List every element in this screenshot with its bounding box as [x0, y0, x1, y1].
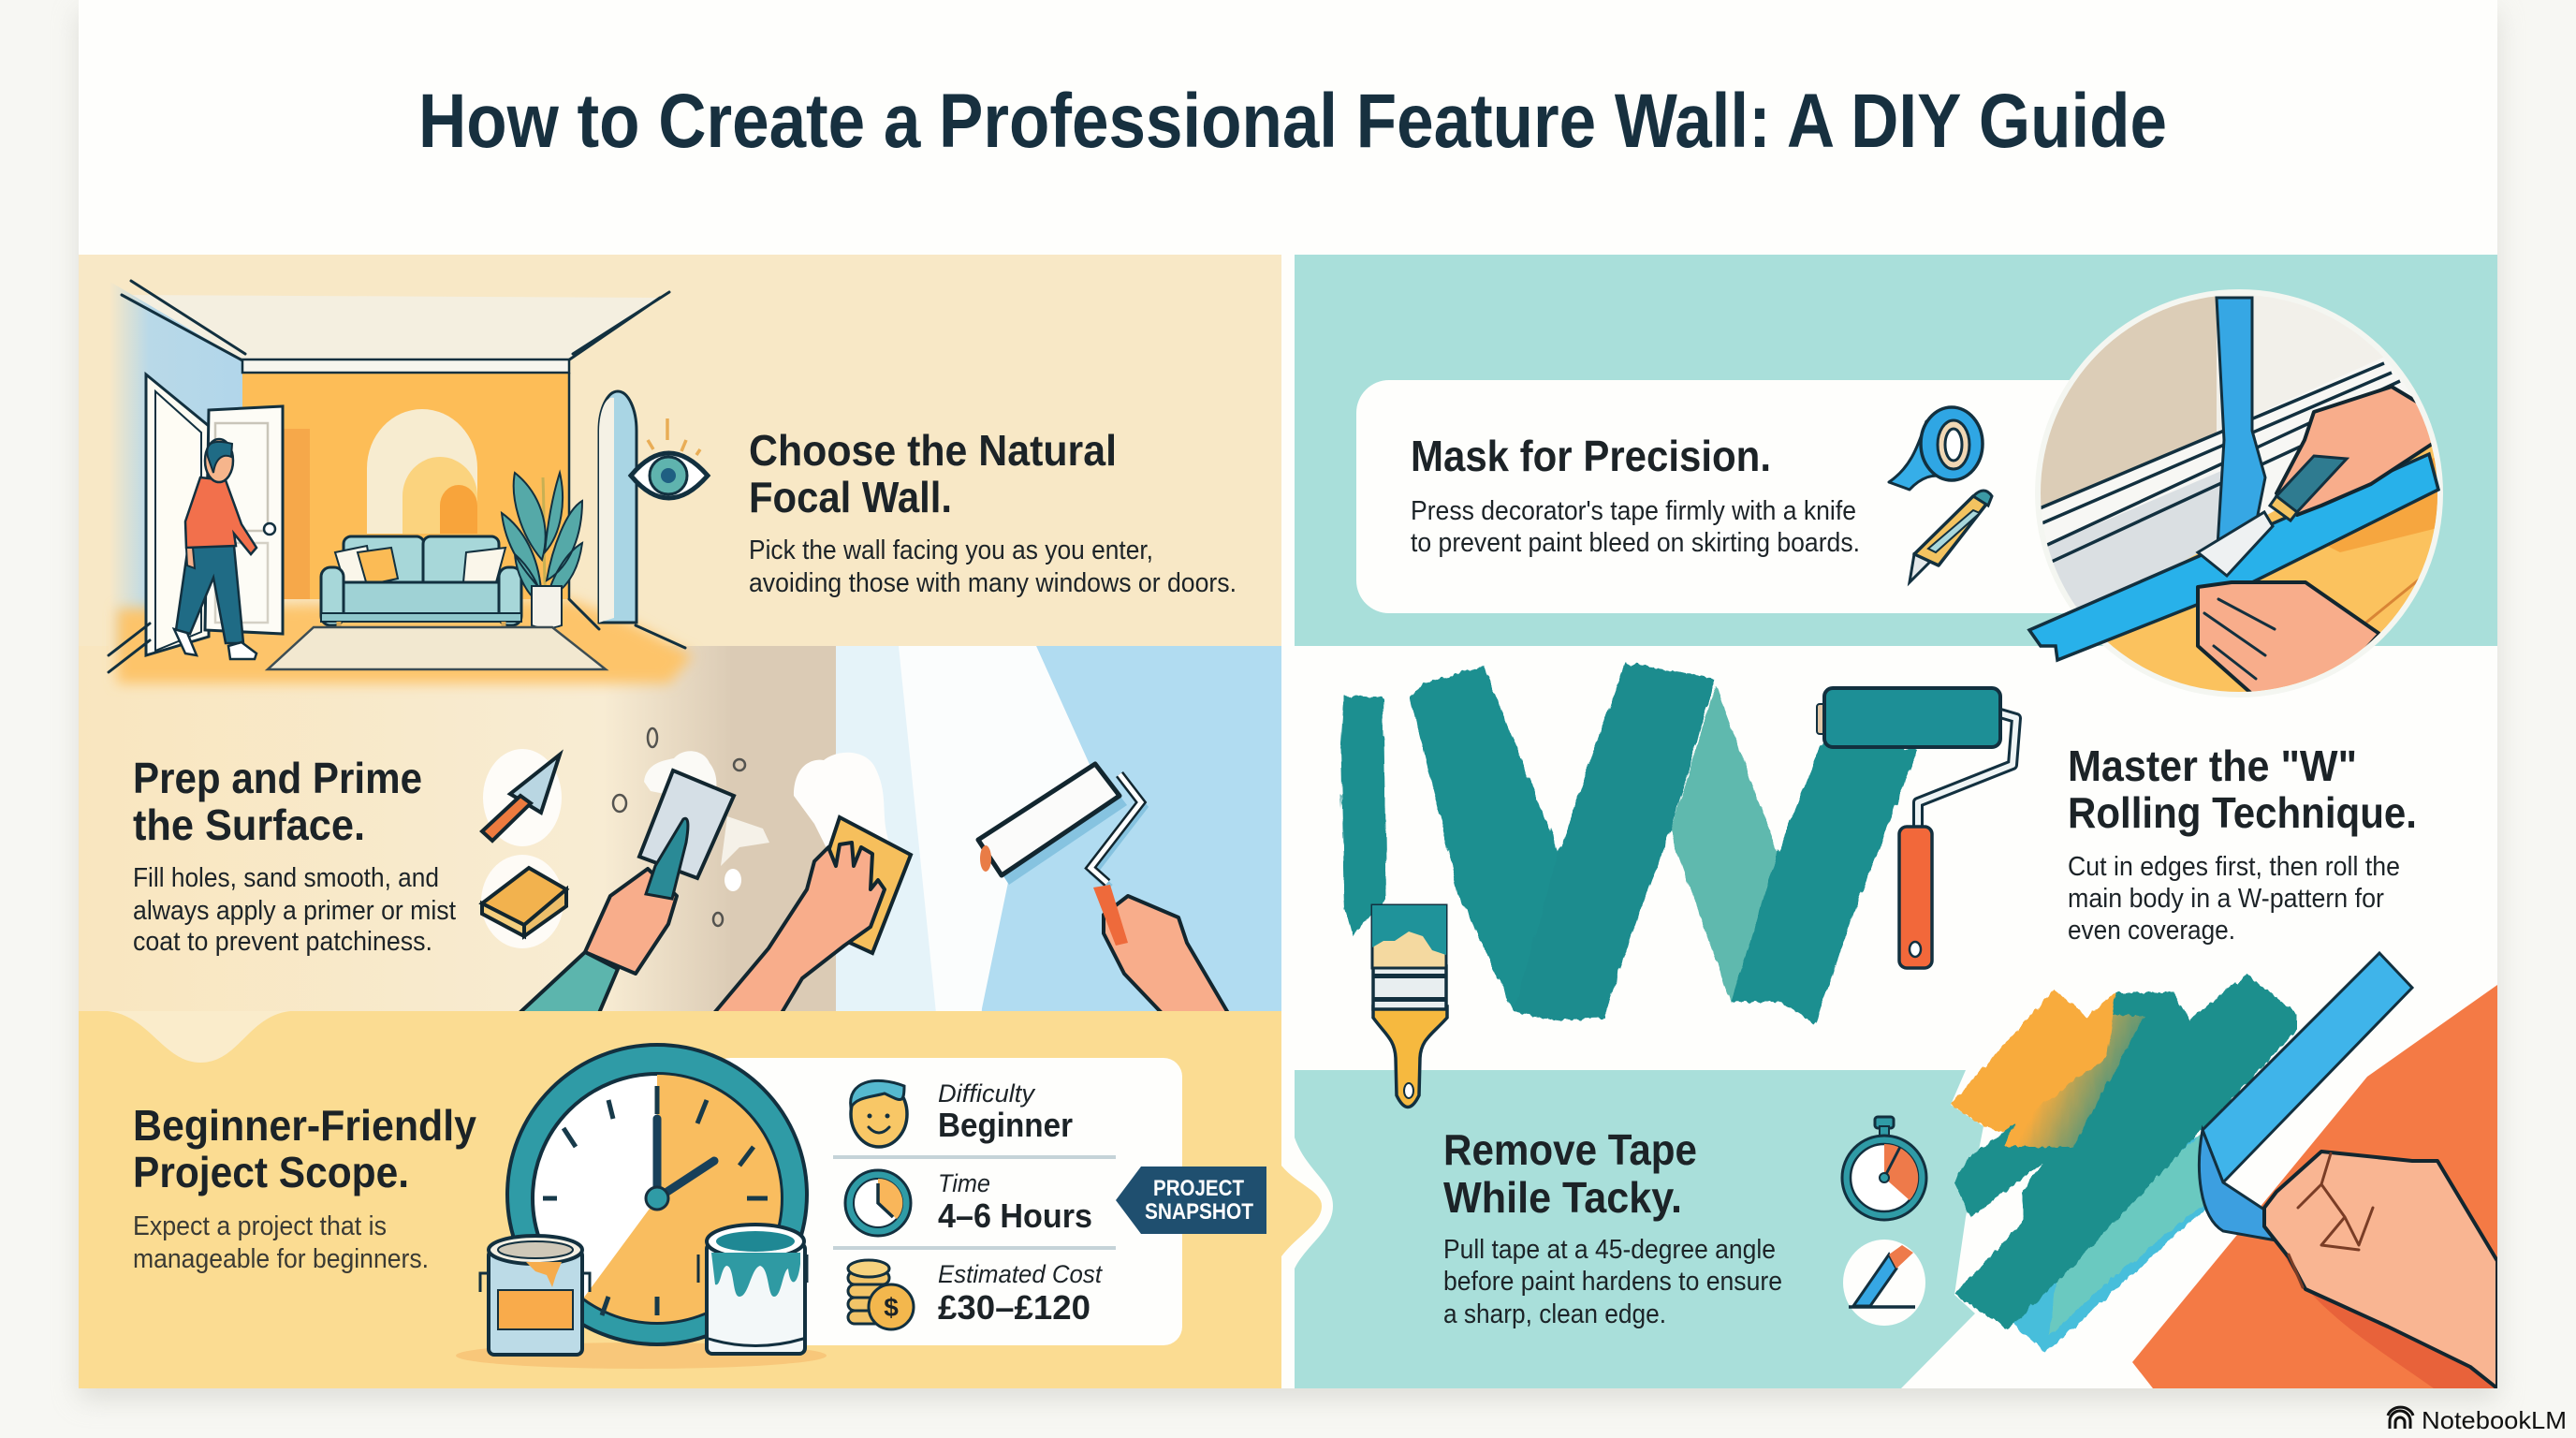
- text: prep and prime: always apply a primer or mist: [133, 896, 456, 926]
- hand pulling tape: [2264, 1152, 2497, 1388]
- text: prep and prime: coat to prevent patchiness.: [133, 927, 432, 957]
- paint strokes: [1951, 974, 2297, 1353]
- plant: [502, 473, 582, 628]
- text: choose the natural focal wall: Choose the Natural: [749, 426, 1117, 475]
- text: snapshot values: 4–6 Hours: [938, 1196, 1092, 1235]
- icon: small trowel: [482, 749, 562, 846]
- snapshot card: [711, 1058, 1182, 1345]
- text: project scope: [133, 1101, 476, 1274]
- text: choose the natural focal wall: Pick the wall facing you as you enter,: [749, 536, 1153, 565]
- knife handle: [2276, 456, 2347, 512]
- illustration: trowel in hand: [520, 770, 734, 1013]
- text: remove tape: While Tacky.: [1443, 1173, 1682, 1222]
- lower hand: [2198, 582, 2379, 697]
- text: mask for precision: [1411, 432, 1860, 558]
- illustration: W paint strokes: [1340, 663, 1918, 1024]
- text: master the W: main body in a W-pattern for: [2068, 884, 2384, 914]
- text: project scope: Project Scope.: [133, 1148, 409, 1196]
- icon: small sponge: [481, 855, 566, 948]
- paint can: teal: [698, 1225, 807, 1354]
- text: project scope: manageable for beginners.: [133, 1244, 429, 1274]
- text: snapshot values: £30–£120: [938, 1288, 1090, 1327]
- text: snapshot values: Difficulty: [938, 1079, 1036, 1108]
- illustration: living room: [109, 281, 693, 683]
- icon: small clock: [845, 1170, 911, 1236]
- text: snapshot values: Estimated Cost: [938, 1260, 1103, 1288]
- text: remove tape: Remove Tape: [1443, 1125, 1697, 1174]
- panel: beginner-friendly project scope: [79, 1011, 1281, 1388]
- text card: [1356, 380, 2087, 613]
- text: master the W: even coverage.: [2068, 916, 2235, 946]
- text: remove tape: [1443, 1125, 1782, 1329]
- text: snapshot values: [938, 1079, 1103, 1327]
- text: mask for precision: to prevent paint bleed on skirting boards.: [1411, 528, 1860, 558]
- text: remove tape: before paint hardens to ensure: [1443, 1267, 1782, 1297]
- text: choose the natural focal wall: Focal Wall.: [749, 473, 952, 521]
- badge: project snapshot: SNAPSHOT: [1145, 1199, 1253, 1225]
- icon: eye: [631, 418, 708, 498]
- paint can: orange: [480, 1236, 590, 1355]
- icon: tape roll: [1889, 407, 1983, 490]
- rug: [268, 627, 606, 669]
- wave connector: [1281, 1137, 1333, 1269]
- notebooklm watermark: NotebookLM: [2422, 1406, 2567, 1434]
- illustration: paint brush: [1372, 905, 1447, 1107]
- text: master the W: [2068, 741, 2417, 946]
- text: project scope: Beginner-Friendly: [133, 1101, 476, 1150]
- tape strip: [2029, 454, 2438, 660]
- side arch: [599, 391, 637, 623]
- icon: tape pulling: [1843, 1240, 1925, 1326]
- upper hand: [2276, 387, 2434, 515]
- illustration: clock and paint cans: [456, 1045, 827, 1369]
- text: prep and prime: Prep and Prime: [133, 754, 422, 802]
- badge: project snapshot: PROJECT: [1153, 1176, 1244, 1201]
- wall arches: [367, 409, 477, 534]
- illustration: roller in hand: [978, 764, 1228, 1013]
- text: choose the natural focal wall: [749, 426, 1237, 598]
- divider lines: [833, 1155, 1116, 1250]
- illustration: paint strokes and peeled tape: [1951, 953, 2497, 1388]
- plaster patches: [613, 728, 889, 926]
- icon: coins: [848, 1260, 914, 1329]
- text: prep and prime: [133, 754, 456, 957]
- panel: master the W technique: [1295, 646, 2497, 1072]
- circular illustration: taping the skirting: [2029, 281, 2452, 712]
- text: snapshot values: Beginner: [938, 1106, 1073, 1144]
- text: master the W: Master the "W": [2068, 741, 2357, 790]
- icon: utility knife: [1910, 491, 1992, 582]
- title: How to Create a Professional Feature Wall: A DIY Guide: [418, 79, 2167, 164]
- badge: project snapshot: [1116, 1167, 1266, 1234]
- text: remove tape: a sharp, clean edge.: [1443, 1299, 1666, 1329]
- illustration: sponge in hand: [714, 817, 911, 1013]
- icon: beginner face: [851, 1080, 907, 1147]
- text: mask for precision: Press decorator's tape firmly with a knife: [1411, 496, 1856, 526]
- icon: coins: $: [884, 1293, 899, 1322]
- illustration: paint roller: [1817, 688, 2016, 968]
- putty knife: [2198, 512, 2273, 576]
- icon: stopwatch: [1842, 1117, 1926, 1220]
- panel: prep and prime: [79, 646, 1281, 1013]
- text: prep and prime: Fill holes, sand smooth, and: [133, 863, 439, 893]
- text: master the W: Rolling Technique.: [2068, 788, 2417, 837]
- panel: remove tape while tacky: [1281, 953, 2497, 1388]
- doorway: [146, 374, 209, 655]
- text: choose the natural focal wall: avoiding those with many windows or doors.: [749, 568, 1237, 598]
- text: master the W: Cut in edges first, then roll the: [2068, 852, 2400, 882]
- text: remove tape: Pull tape at a 45-degree angle: [1443, 1235, 1776, 1265]
- text: prep and prime: the Surface.: [133, 800, 365, 849]
- panel: choose the natural focal wall: [79, 255, 1281, 683]
- text: project scope: Expect a project that is: [133, 1211, 387, 1241]
- person: [174, 439, 256, 659]
- sofa: [321, 536, 521, 637]
- panel: mask for precision: [1295, 255, 2497, 646]
- text: mask for precision: Mask for Precision.: [1411, 432, 1771, 480]
- text: snapshot values: Time: [938, 1169, 990, 1197]
